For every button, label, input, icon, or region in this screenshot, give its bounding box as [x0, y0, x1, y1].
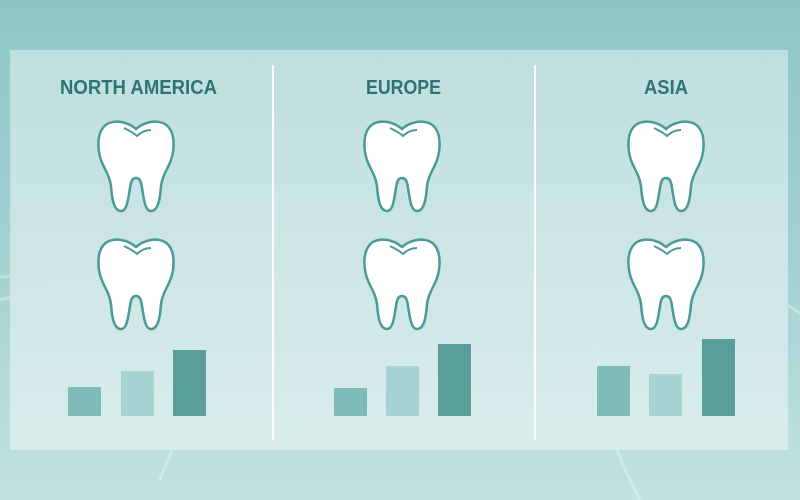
icon: tooth 2: [364, 240, 440, 329]
icon: tooth 2: [98, 240, 174, 329]
icon: tooth 1: [364, 122, 440, 211]
bar chart: asia: [597, 339, 735, 416]
panel: europe: [334, 77, 471, 416]
panel: north america: [60, 77, 217, 416]
heading: north america: NORTH AMERICA: [60, 77, 217, 99]
bar chart: north america: [68, 350, 206, 416]
heading: europe: EUROPE: [366, 77, 441, 99]
background decorative teeth: [0, 276, 800, 500]
heading: asia: ASIA: [644, 77, 688, 99]
main panel: [10, 50, 788, 450]
icon: tooth 1: [98, 122, 174, 211]
icon: tooth 2: [628, 240, 704, 329]
icon: tooth 1: [628, 122, 704, 211]
panel: asia: [597, 77, 735, 416]
bar chart: europe: [334, 344, 471, 416]
